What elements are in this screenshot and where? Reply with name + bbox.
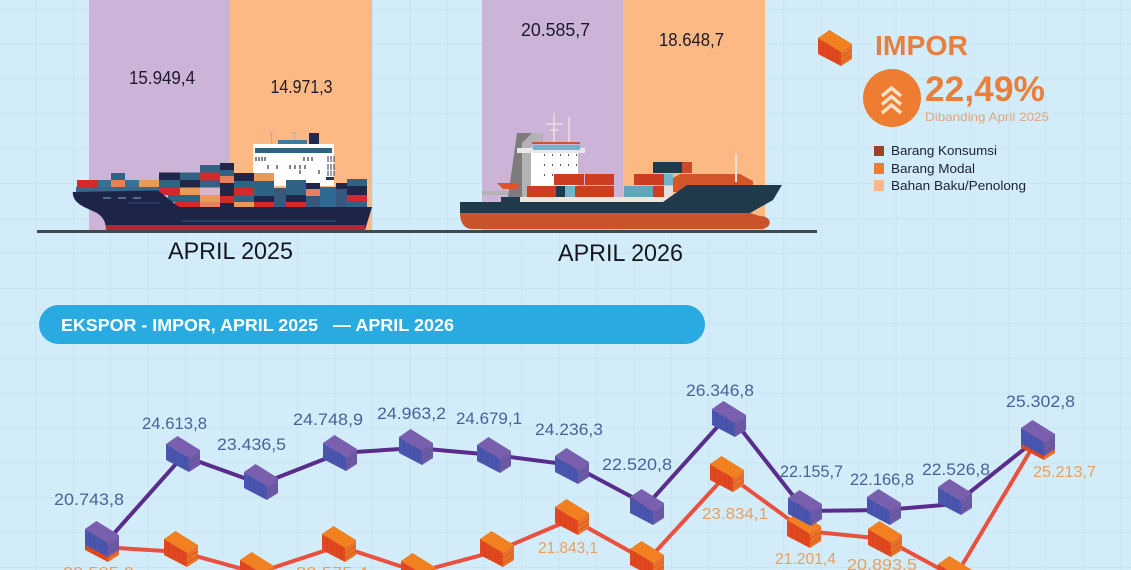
labels: ekspor values: 22.526,8 [922,461,990,479]
value: percent change: 22,49% [925,70,1045,109]
labels: ekspor values: 24.748,9 [293,411,363,429]
heading pill: ekspor-impor [39,305,705,344]
value: orange bar 2025: 14.971,3 [270,77,332,97]
value: purple bar 2025: 15.949,4 [129,67,195,88]
labels: impor values: 25.213,7 [1033,464,1096,481]
labels: ekspor values: 24.236,3 [535,421,603,439]
legend: Barang Konsumsi [891,144,997,158]
line: ekspor [102,414,1038,547]
heading pill: ekspor-impor: — APRIL 2026 [333,315,454,335]
containers: impor [85,424,1055,570]
panel: April 2026 bars [482,0,765,230]
icon: orange container [818,30,852,66]
icon: container ship 2026 [460,113,782,229]
labels: ekspor values: 24.963,2 [377,405,446,423]
icon: container ship 2025 [73,132,372,230]
labels: impor values: 23.834,1 [702,506,768,523]
labels: impor values: 21.843,1 [538,540,598,557]
value: purple bar 2026: 20.585,7 [521,19,590,40]
panel: April 2025 bars [89,0,372,230]
labels: ekspor values: 23.436,5 [217,436,286,454]
labels: ekspor values: 26.346,8 [686,382,754,400]
legend: Bahan Baku/Penolong [891,179,1026,193]
note: comparison: Dibanding April 2025 [925,110,1049,124]
label: April 2025: APRIL 2025 [168,238,293,265]
icon: up chevrons circle [863,69,921,127]
value: orange bar 2026: 18.648,7 [659,30,724,50]
labels: ekspor values: 24.679,1 [456,410,522,428]
line: impor [102,438,1038,570]
panel: impor summary [818,30,1049,193]
line chart: ekspor impor [54,382,1096,570]
legend: Barang Modal [891,162,975,176]
labels: ekspor values: 22.155,7 [780,463,843,481]
labels: impor values: 21.201,4 [775,551,836,568]
labels: ekspor values: 24.613,8 [142,415,207,433]
heading: impor: IMPOR [875,30,968,61]
labels: ekspor values: 22.166,8 [850,471,914,489]
ground line [37,230,817,233]
containers: ekspor [85,401,1055,557]
label: April 2026: APRIL 2026 [558,240,683,267]
labels: ekspor values: 22.520,8 [602,456,672,474]
legend [874,144,1026,193]
labels: ekspor values: 25.302,8 [1006,393,1075,411]
labels: ekspor values [54,382,1075,509]
heading pill: ekspor-impor: EKSPOR - IMPOR, APRIL 2025 [61,315,318,335]
labels: ekspor values: 20.743,8 [54,491,124,509]
labels: impor values [63,464,1096,570]
